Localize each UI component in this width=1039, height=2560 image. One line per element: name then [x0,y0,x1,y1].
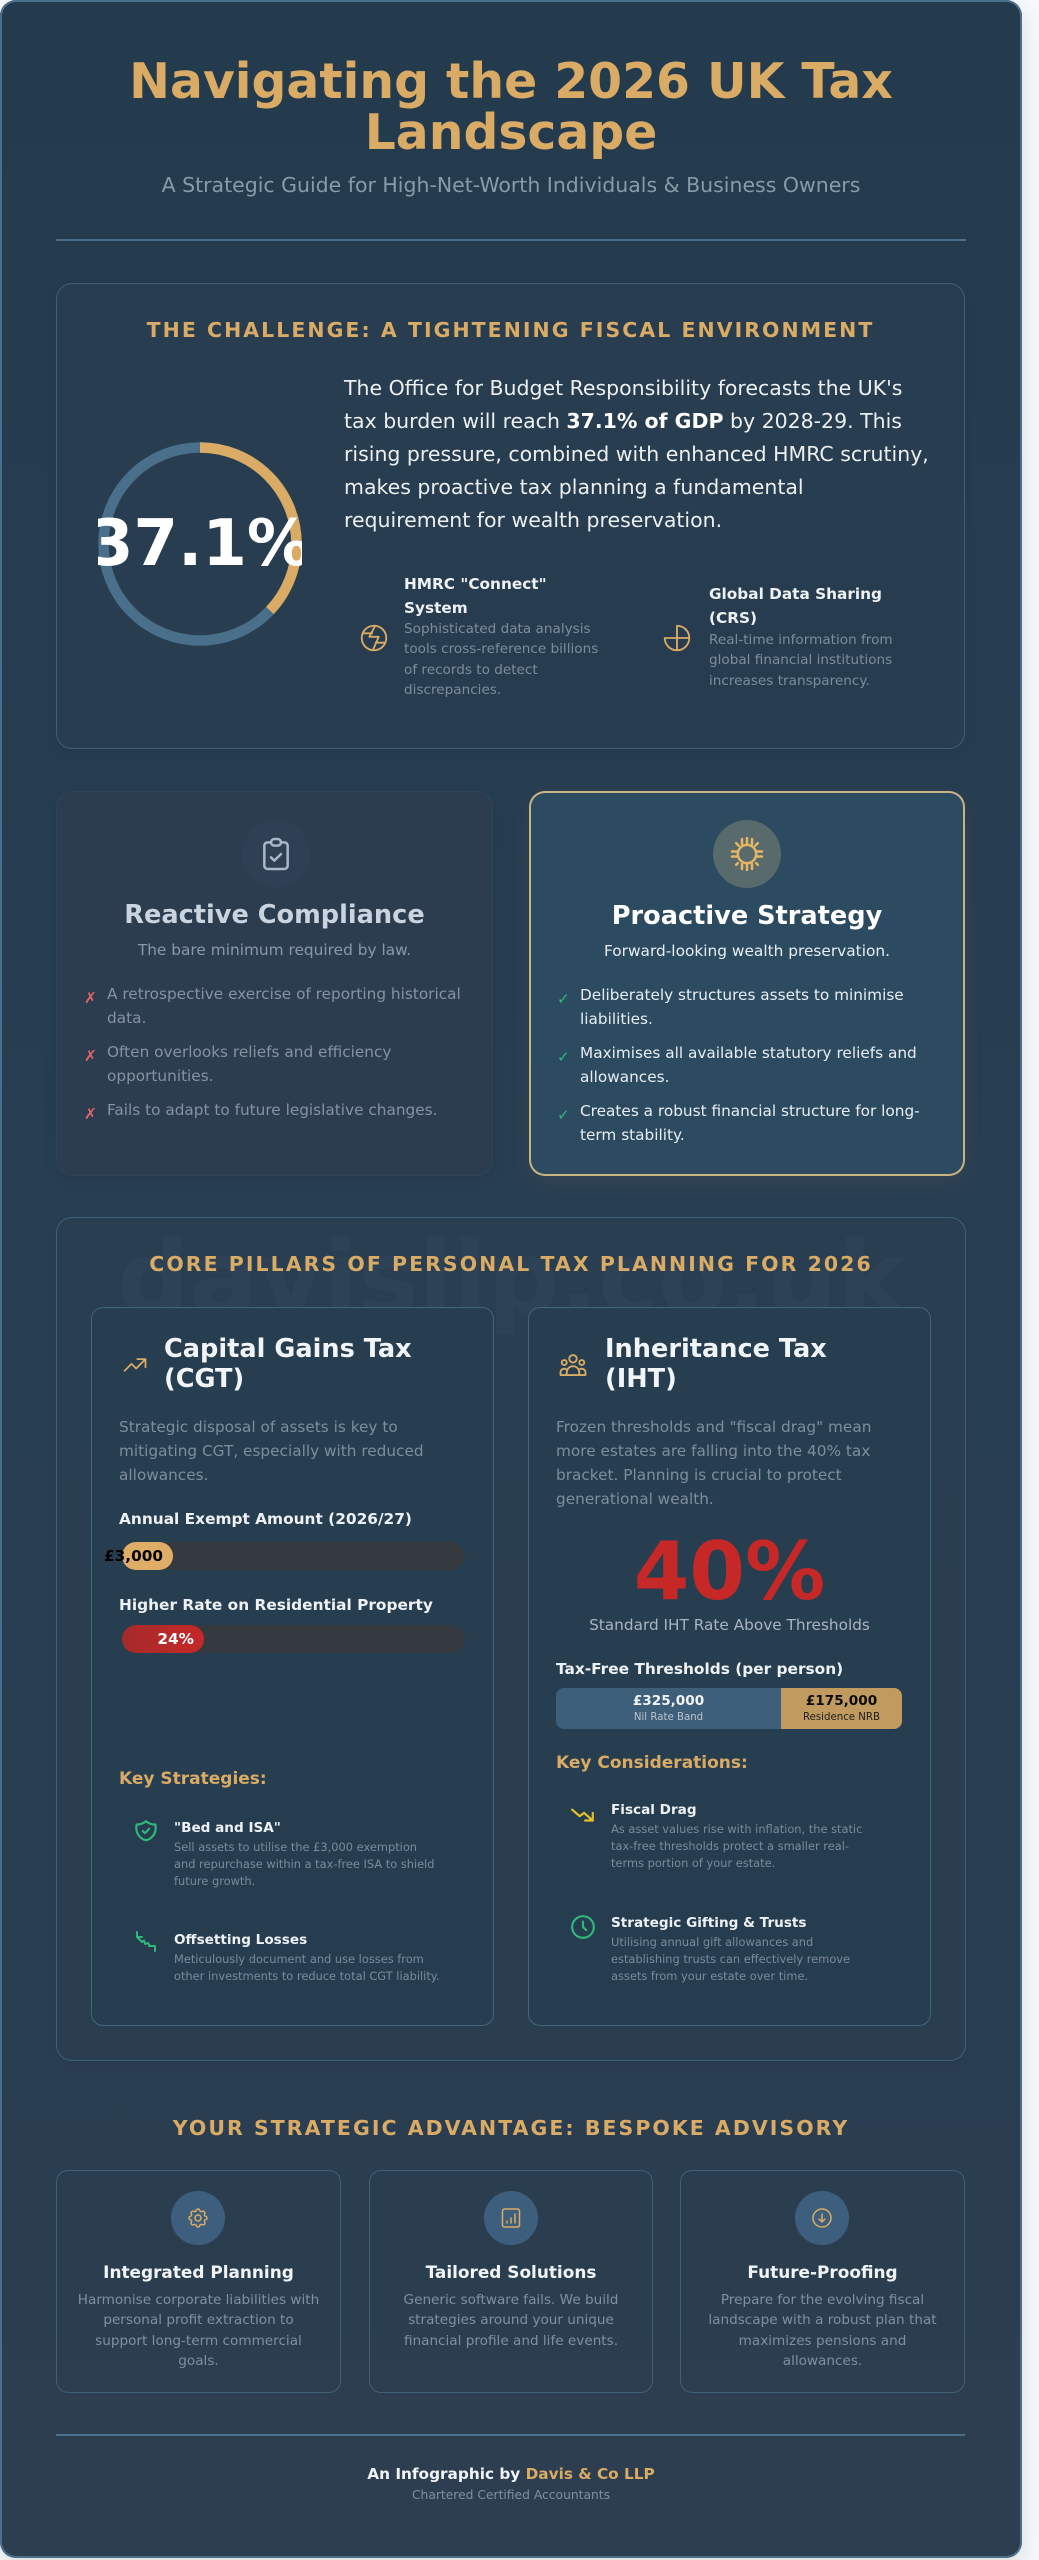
icon: clipboard check [242,820,310,888]
header divider [56,239,966,241]
icon: arrow down circle [795,2191,849,2245]
offsetting losses title: Offsetting Losses [174,1932,307,1948]
item 1: liabilities. [580,1010,653,1028]
CRS title: Global Data Sharing [709,585,882,603]
CRS description: increases transparency. [709,673,870,689]
watermark: davisllp.co.uk [117,1219,905,1337]
title [129,53,893,161]
item 1: A retrospective exercise of reporting historical [107,985,461,1003]
footer [56,2434,965,2502]
title: Landscape [365,104,657,161]
consideration: fiscal drag [556,1790,902,1884]
item 1: Deliberately structures assets to minimise [580,986,904,1004]
CRS description: global financial institutions [709,652,892,668]
label: higher rate: Higher Rate on Residential Property [119,1596,433,1614]
footer subtitle: Chartered Certified Accountants [412,2488,610,2502]
icon: sun [713,820,781,888]
strategy: bed and ISA [119,1807,466,1902]
tailored solutions text: strategies around your unique [408,2312,614,2328]
gifting text: assets from your estate over time. [611,1968,808,1982]
card: tailored solutions [369,2170,653,2393]
bed and ISA text: future growth. [174,1874,255,1888]
proactive list [557,986,920,1144]
check mark 3: ✓ [557,1106,570,1124]
key strategies heading: Key Strategies: [119,1769,267,1789]
future-proofing title: Future-Proofing [747,2262,898,2282]
item 3: Creates a robust financial structure for long- [580,1102,920,1120]
gifting text: establishing trusts can effectively remove [611,1952,850,1966]
item 3: Fails to adapt to future legislative changes. [107,1101,437,1119]
integrated planning text: Harmonise corporate liabilities with [78,2292,319,2308]
proactive heading: Proactive Strategy [612,901,882,931]
future-proofing text [708,2292,937,2369]
IHT description: more estates are falling into the 40% tax [556,1442,870,1460]
icon: lightning in circle [360,624,388,652]
IHT description: Frozen thresholds and "fiscal drag" mean [556,1418,871,1436]
HMRC description: discrepancies. [404,682,501,698]
consideration: gifting and trusts [556,1903,902,1997]
subtitle: A Strategic Guide for High-Net-Worth Individuals & Business Owners [162,173,860,197]
HMRC title: System [404,599,468,617]
fiscal drag title: Fiscal Drag [611,1802,697,1818]
icon: people group [560,1354,586,1376]
bed and ISA text [174,1840,435,1888]
future-proofing text: maximizes pensions and [739,2333,906,2349]
offsetting losses text: other investments to reduce total CGT liability. [174,1968,440,1982]
panel: the challenge [56,283,965,749]
residence NRB [781,1688,902,1729]
threshold stacked bar [556,1688,902,1729]
CGT heading [164,1334,412,1394]
stat: HMRC Connect system [346,557,625,713]
CRS title: (CRS) [709,609,757,627]
item 1: data. [107,1009,146,1027]
item 2 [107,1043,391,1085]
CGT description [119,1418,424,1484]
reactive list [84,985,461,1123]
CRS description: Real-time information from [709,632,893,648]
item 1 [107,985,461,1027]
cross mark 2: ✗ [84,1047,97,1065]
challenge paragraph: makes proactive tax planning a fundamental [344,475,804,499]
offsetting losses text [174,1952,440,1982]
bed and ISA title: "Bed and ISA" [174,1820,281,1836]
residence NRB label: Residence NRB [803,1712,880,1723]
integrated planning text [78,2292,319,2369]
fiscal drag text: As asset values rise with inflation, the static [611,1822,862,1836]
card: integrated planning [56,2170,341,2393]
heading: core pillars: CORE PILLARS OF PERSONAL TAX PLANNING FOR 2026 [149,1252,873,1276]
integrated planning title: Integrated Planning [103,2262,294,2282]
CGT description: allowances. [119,1466,208,1484]
integrated planning text: support long-term commercial [95,2333,302,2349]
cross mark 1: ✗ [84,989,97,1007]
gifting text [611,1934,850,1982]
icon: trending up [124,1358,146,1372]
offsetting losses text: Meticulously document and use losses from [174,1952,424,1966]
IHT description [556,1418,871,1508]
icon: clock [571,1915,595,1939]
gifting text: Utilising annual gift allowances and [611,1934,813,1948]
card: inheritance tax [528,1307,931,2026]
IHT description: generational wealth. [556,1490,714,1508]
nil rate band [556,1688,781,1729]
integrated planning text: goals. [178,2353,219,2369]
CRS title [709,585,882,627]
item 2: allowances. [580,1068,669,1086]
card: future-proofing [680,2170,965,2393]
card: capital gains tax [91,1307,494,2026]
bar fill 24% [122,1625,204,1653]
bar: 24% higher rate [122,1625,465,1653]
strategy: offsetting losses [119,1920,466,1997]
panel: reactive compliance [56,791,493,1176]
footer credit: An Infographic by Davis & Co LLP [367,2465,655,2483]
£175,000: £175,000 [806,1693,877,1709]
tailored solutions text [404,2292,618,2349]
CGT heading: (CGT) [164,1364,244,1394]
big stat: 40%: 40% [634,1525,825,1618]
integrated planning text: personal profit extraction to [103,2312,294,2328]
key considerations heading: Key Considerations: [556,1753,748,1773]
IHT heading: (IHT) [605,1364,677,1394]
HMRC description: Sophisticated data analysis [404,621,591,637]
icon: trending down [571,1808,594,1822]
HMRC description: of records to detect [404,662,538,678]
reactive heading: Reactive Compliance [124,900,425,930]
challenge paragraph: The Office for Budget Responsibility forecasts the UK's [344,376,902,400]
heading: the challenge: THE CHALLENGE: A TIGHTENING FISCAL ENVIRONMENT [147,318,874,342]
CGT description: Strategic disposal of assets is key to [119,1418,398,1436]
bed and ISA text: and repurchase within a tax-free ISA to shield [174,1856,435,1870]
check mark 1: ✓ [557,990,570,1008]
proactive subheading: Forward-looking wealth preservation. [604,942,890,960]
bed and ISA text: Sell assets to utilise the £3,000 exemption [174,1840,417,1854]
gifting title: Strategic Gifting & Trusts [611,1915,807,1931]
fiscal drag text: tax-free thresholds protect a smaller real- [611,1838,849,1852]
CGT description: mitigating CGT, especially with reduced [119,1442,424,1460]
challenge paragraph [344,376,929,532]
bar fill 24%: 24% [157,1630,194,1648]
fiscal drag text [611,1822,862,1870]
reactive subheading: The bare minimum required by law. [138,941,411,959]
challenge paragraph: tax burden will reach 37.1% of GDP by 2028-29. This [344,409,902,433]
label: thresholds: Tax-Free Thresholds (per person) [556,1660,843,1678]
future-proofing text: Prepare for the evolving fiscal [721,2292,924,2308]
fiscal drag text: terms portion of your estate. [611,1856,775,1870]
£325,000: £325,000 [633,1693,704,1709]
footer divider [56,2434,965,2436]
nil rate band label: Nil Rate Band [634,1712,703,1723]
check mark 2: ✓ [557,1048,570,1066]
tailored solutions text: Generic software fails. We build [404,2292,618,2308]
item 3 [580,1102,920,1144]
HMRC description [404,621,598,698]
tailored solutions text: financial profile and life events. [404,2333,618,2349]
future-proofing text: landscape with a robust plan that [708,2312,937,2328]
item 2: Often overlooks reliefs and efficiency [107,1043,391,1061]
item 2 [580,1044,917,1086]
tailored solutions title: Tailored Solutions [426,2262,596,2282]
title: Navigating the 2026 UK Tax [129,53,893,110]
HMRC title [404,575,547,617]
item 3: term stability. [580,1126,685,1144]
bar fill £3,000: £3,000 [104,1547,163,1565]
cross mark 3: ✗ [84,1105,97,1123]
bar: £3,000 exempt amount [122,1542,465,1570]
bar fill £3,000 [122,1542,173,1570]
donut chart: 37.1% of GDP [98,442,302,646]
challenge paragraph: requirement for wealth preservation. [344,508,722,532]
heading: strategic advantage: YOUR STRATEGIC ADVANTAGE: BESPOKE ADVISORY [173,2116,849,2140]
future-proofing text: allowances. [783,2353,862,2369]
header [56,53,966,241]
icon: zigzag down [136,1931,156,1952]
CGT heading: Capital Gains Tax [164,1334,412,1364]
HMRC title: HMRC "Connect" [404,575,547,593]
HMRC description: tools cross-reference billions [404,641,598,657]
icon: cog [171,2191,225,2245]
IHT description: bracket. Planning is crucial to protect [556,1466,842,1484]
item 1 [580,986,904,1028]
CRS description [709,632,893,689]
icon: quartered globe [664,624,690,652]
item 2: Maximises all available statutory reliefs and [580,1044,917,1062]
icon: shield check [135,1820,157,1842]
challenge paragraph: rising pressure, combined with enhanced HMRC scrutiny, [344,442,929,466]
stat: global data sharing [649,557,928,713]
panel: proactive strategy [529,791,965,1176]
label: annual exempt amount: Annual Exempt Amount (2026/27) [119,1510,412,1528]
IHT heading [605,1334,827,1394]
item 2: opportunities. [107,1067,214,1085]
40% caption: Standard IHT Rate Above Thresholds [589,1616,870,1634]
IHT heading: Inheritance Tax [605,1334,827,1364]
panel: core pillars [56,1217,966,2061]
icon: bar chart square [484,2191,538,2245]
